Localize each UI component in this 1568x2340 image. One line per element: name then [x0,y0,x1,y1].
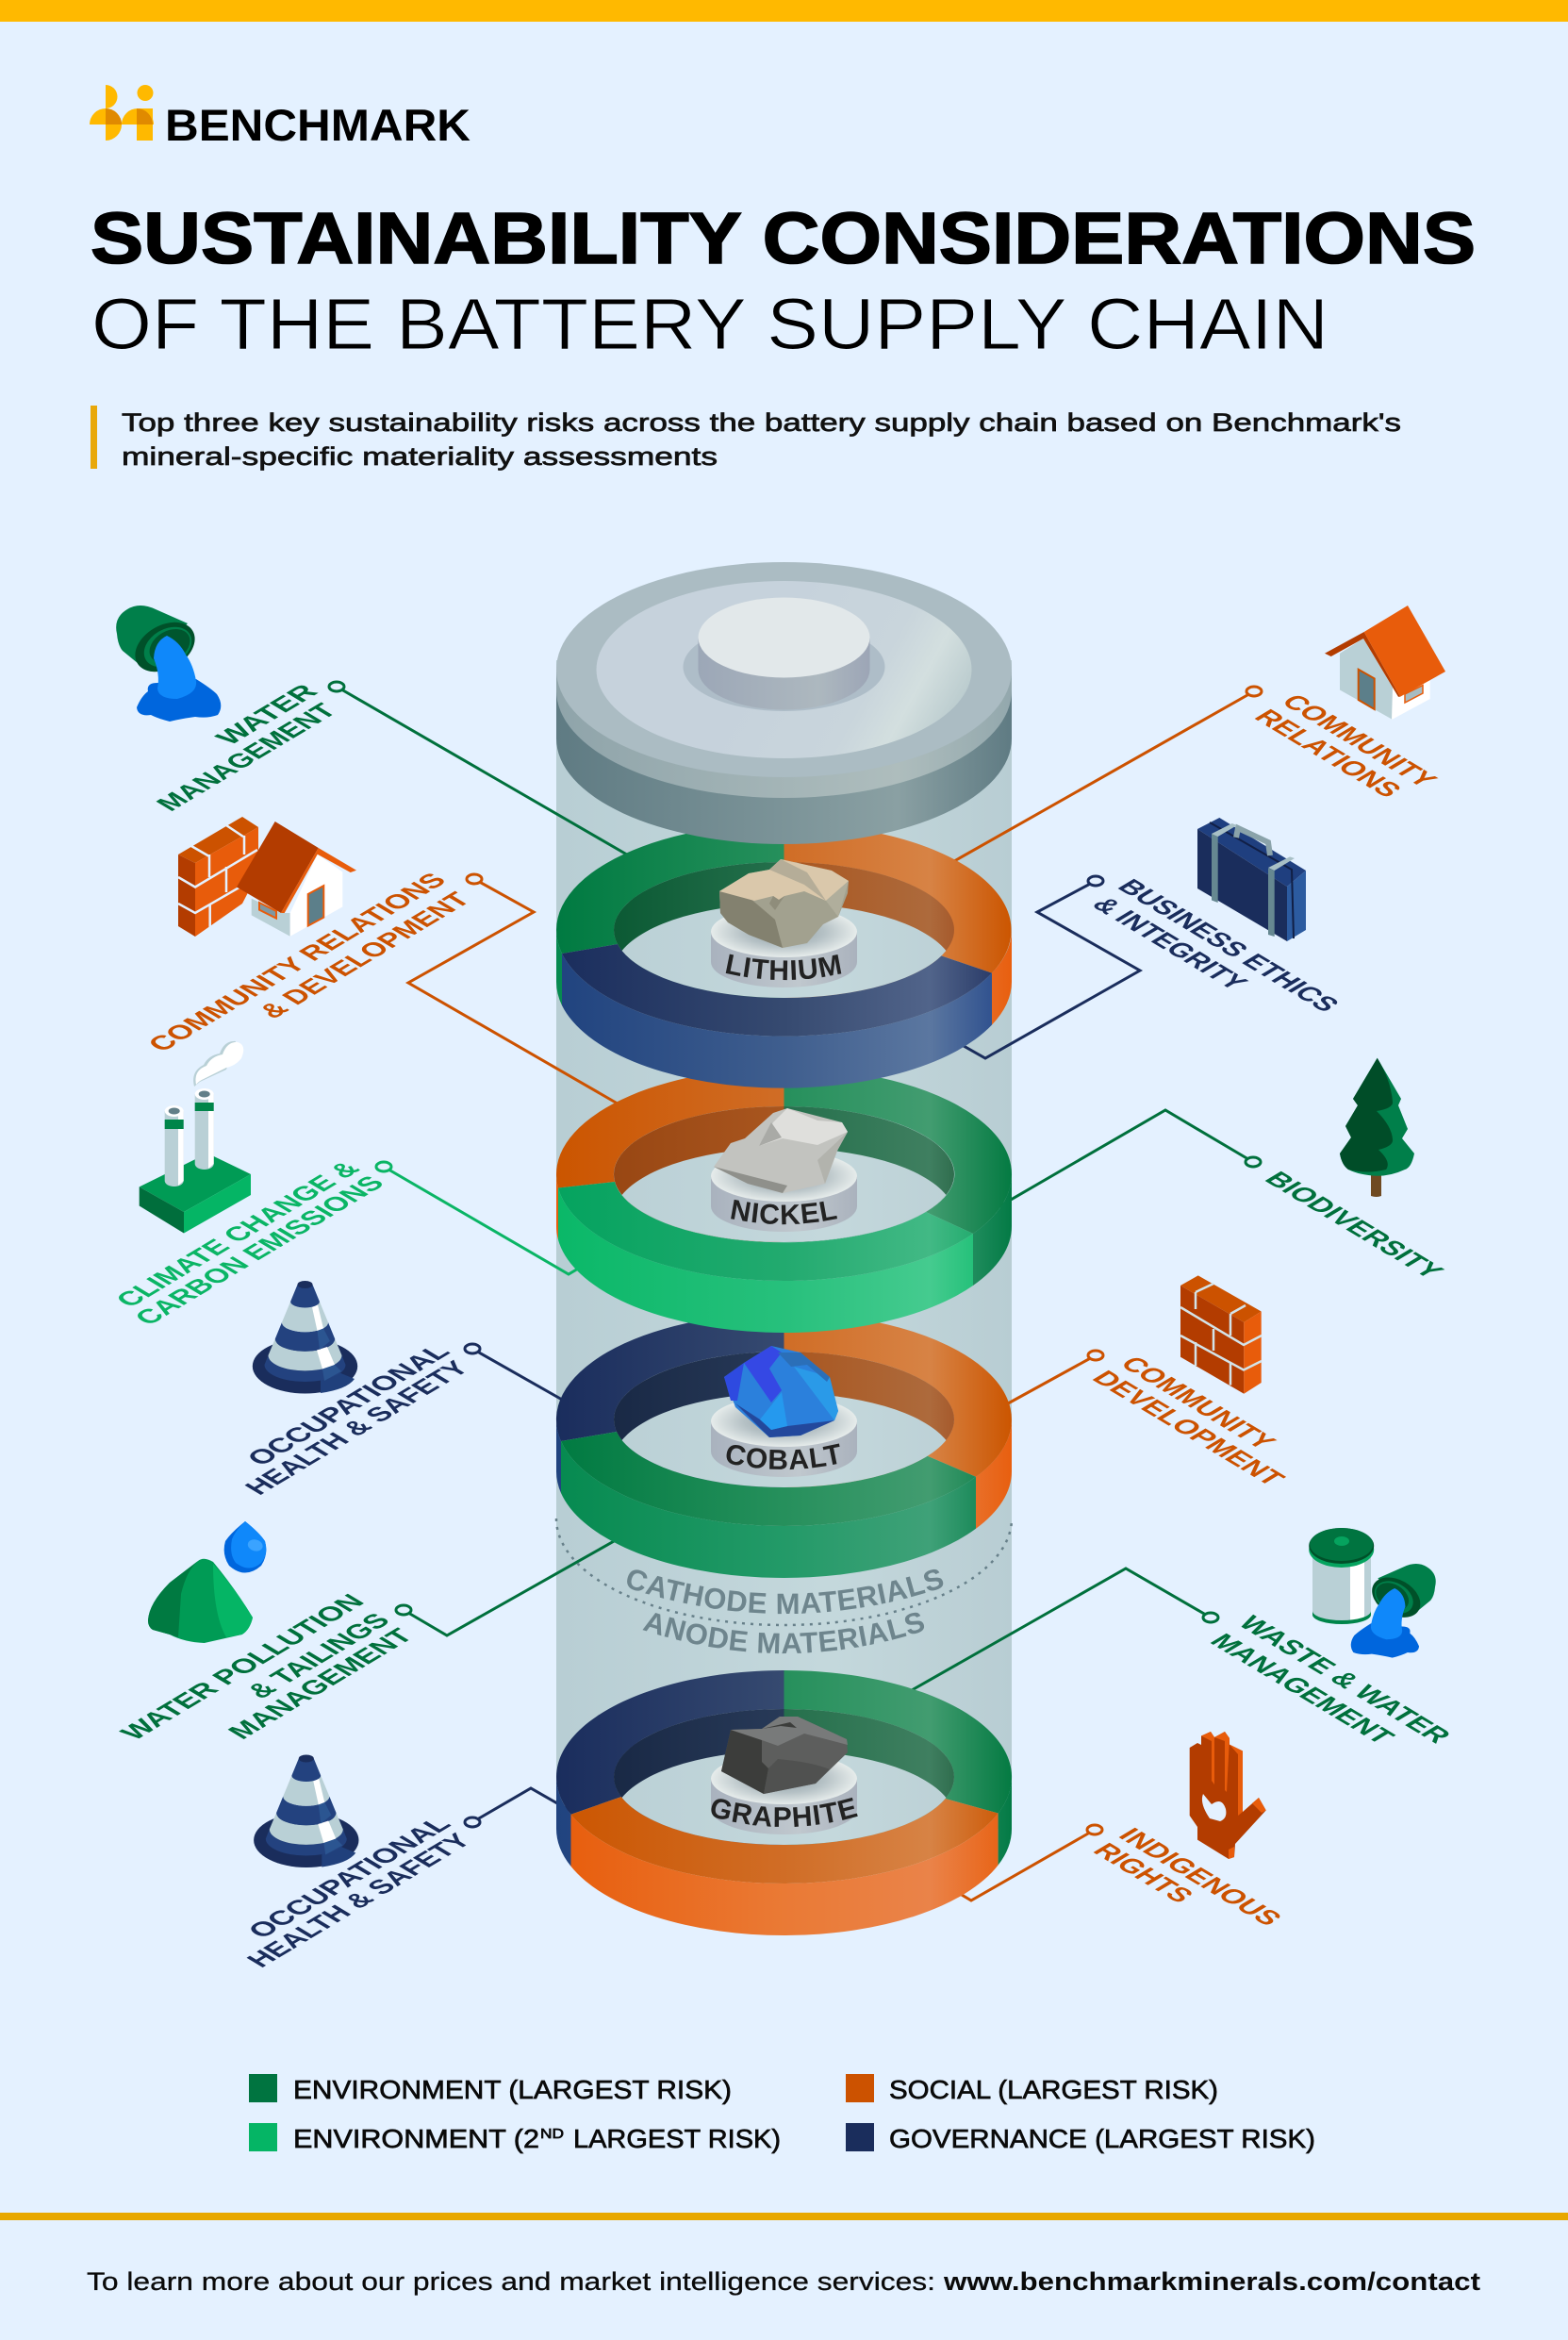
icon: safety cone upper [253,1281,357,1394]
rock: lithium [719,859,849,948]
rock: graphite [721,1717,848,1794]
legend: governance: GOVERNANCE (LARGEST RISK) [889,2124,1315,2153]
label: waste and water management: WASTE & WATER [1231,1612,1457,1748]
label: waste and water management: MANAGEMENT [1203,1630,1400,1749]
title [91,198,1476,365]
legend: environment largest: ENVIRONMENT (LARGEST RISK) [293,2075,732,2104]
label: climate change and carbon emissions: CARBON EMISSIONS [129,1171,391,1330]
legend: environment second largest [249,2123,781,2153]
label: water pollution and tailings management: MANAGEMENT [223,1624,421,1744]
label: community development: DEVELOPMENT [1085,1367,1291,1490]
top accent band [0,0,1568,22]
icon: water bucket left [116,606,221,722]
ring: lithium: LITHIUM [726,954,841,981]
label: community relations: COMMUNITY [1275,690,1443,791]
ring: lithium [556,834,1012,1088]
icon: hand [1190,1732,1266,1859]
label: water management: WATER [210,680,324,750]
label: community relations and development: & DEVELOPMENT [254,888,477,1023]
icon: house right [1325,606,1445,720]
rock: cobalt [724,1346,838,1437]
connector lines [329,682,1262,1900]
icon: tree [1340,1058,1414,1197]
label: water management: MANAGEMENT [151,700,343,816]
label: community relations: RELATIONS [1247,705,1408,802]
label: occupational health and safety lower: OCCUPATIONAL [242,1813,457,1943]
title: SUSTAINABILITY CONSIDERATIONS [91,198,1476,279]
label: water pollution and tailings management: WATER POLLUTION [115,1590,371,1745]
legend: environment second largest: LARGEST RISK) [573,2124,781,2153]
label: indigenous rights: INDIGENOUS [1112,1824,1288,1930]
legend: environment second largest: ENVIRONMENT (2 [293,2124,539,2153]
footer text [87,2267,1480,2296]
subtitle [91,406,1401,471]
legend: social: SOCIAL (LARGEST RISK) [889,2075,1218,2104]
footer rule [0,2213,1568,2220]
footer text: www.benchmarkminerals.com/contact [943,2267,1480,2296]
label: business ethics and integrity: & INTEGRITY [1085,893,1253,994]
subtitle: mineral-specific materiality assessments [122,442,718,471]
label: indigenous rights: RIGHTS [1086,1839,1199,1907]
label: business ethics and integrity: BUSINESS ETHICS [1111,875,1345,1016]
logo [90,85,470,150]
ring: cobalt [556,1322,1012,1578]
label: biodiversity: BIODIVERSITY [1258,1168,1449,1283]
ring: nickel: NICKEL [731,1200,837,1224]
icon: brick wall right [1180,1275,1262,1394]
subtitle: Top three key sustainability risks across the battery supply chain based on Benchmark's [122,408,1401,437]
legend [249,2074,1315,2153]
battery cap [556,562,1012,844]
legend: environment second largest: ND [540,2126,564,2142]
cathode / anode divider: CATHODE MATERIALS [627,1569,943,1615]
label: community relations and development: COMMUNITY RELATIONS [142,869,454,1056]
rock: nickel [714,1108,848,1193]
label: occupational health and safety lower: HEALTH & SAFETY [241,1830,478,1972]
ring: graphite [556,1670,1013,1935]
icon: safety cone lower [254,1754,358,1867]
icon: briefcase [1197,818,1306,941]
icon: bin and spilled bucket [1309,1528,1436,1658]
title: OF THE BATTERY SUPPLY CHAIN [91,284,1329,365]
icon: brick wall and house [178,817,356,937]
logo: BENCHMARK [165,100,470,150]
label: occupational health and safety upper: OCCUPATIONAL [241,1340,456,1470]
icon: factory [140,1041,251,1234]
label: climate change and carbon emissions: CLIMATE CHANGE & [110,1157,367,1312]
ring: cobalt: COBALT [726,1443,839,1469]
icon: tailings pile and drop [148,1521,266,1643]
label: water pollution and tailings management: & TAILINGS [241,1609,397,1703]
footer text: To learn more about our prices and market intelligence services: [87,2267,935,2296]
cathode / anode divider [554,1519,1013,1654]
label: occupational health and safety upper: HEALTH & SAFETY [239,1357,476,1500]
battery body [556,660,1012,1829]
label: community development: COMMUNITY [1114,1353,1281,1453]
cathode / anode divider: ANODE MATERIALS [643,1613,924,1654]
ring: graphite: GRAPHITE [711,1798,858,1827]
ring: nickel [556,1077,1012,1333]
